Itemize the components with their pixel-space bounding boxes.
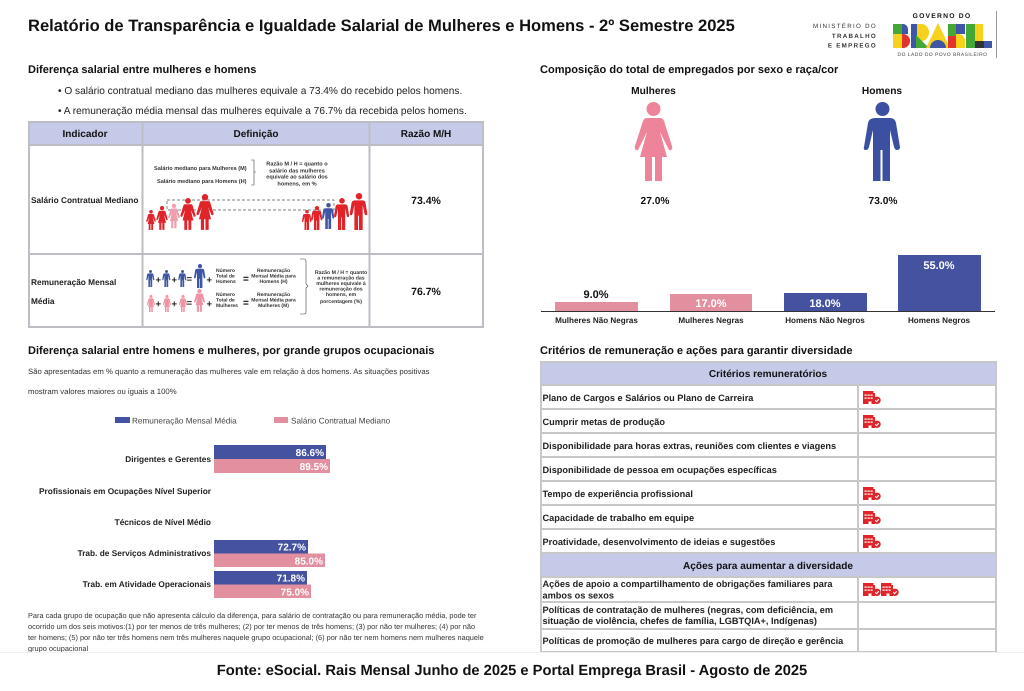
label: homens: Homens [862, 86, 902, 97]
table rows: Ações de apoio a compartilhamento de obrigações familiares para [542, 579, 833, 589]
diagram: salário mediano: Razão M / H = quanto o [266, 160, 328, 168]
table rows: Plano de Cargos e Salários ou Plano de Carreira [542, 393, 754, 403]
heading: critérios: Critérios de remuneração e ações para garantir diversidade [540, 345, 853, 357]
diagram: remuneração média: = [243, 298, 249, 309]
chart: grupos ocupacionais: 86.6% [296, 448, 324, 459]
diagram: salário mediano: Salário mediano para Homens (H) [157, 178, 247, 185]
heading: diferença salarial: Diferença salarial entre mulheres e homens [28, 64, 256, 76]
row: salário contratual mediano: 73.4% [411, 195, 442, 207]
text block: explicação [28, 367, 430, 396]
diagram: remuneração média: + [206, 275, 212, 286]
diagram: remuneração média: Total de [216, 298, 235, 304]
legend: Salário Contratual Mediano [291, 416, 391, 426]
chart: grupos ocupacionais: Trab. de Serviços Administrativos [78, 548, 211, 558]
table rows: Tempo de experiência profissional [542, 489, 693, 499]
row: remuneração mensal média [31, 259, 442, 314]
table: critérios e ações [541, 362, 996, 652]
value: 27,0%: 27.0% [641, 196, 669, 207]
diagram: salário mediano: salário das mulheres [269, 168, 325, 174]
bar: mulheres não negras: 9.0% [583, 289, 609, 301]
chart: grupos ocupacionais [39, 445, 330, 598]
B [893, 24, 902, 34]
bar: mulheres negras [670, 294, 752, 325]
diagram: remuneração média: Número [216, 268, 235, 274]
table rows [542, 393, 844, 646]
R [911, 24, 919, 48]
table section headers [683, 369, 853, 572]
legend: Remuneração Mensal Média [132, 416, 237, 426]
text block: explicação: São apresentadas em % quanto a remuneração das mulheres vale em relação à dos homens. As situações positivas [28, 367, 430, 376]
text block: nota: Para cada grupo de ocupação que não apresenta cálculo da diferença, para salário de contratação ou para remuneração média, pode ter [28, 611, 477, 620]
diagram: remuneração média: Total de [216, 274, 235, 280]
A [926, 23, 950, 48]
text block: nota: ocorrido um dos seis motivos:(1) por ter menos de três mulheres; (2) por ter menos de três homens; (3) por não ter mulheres; (4) por não [28, 622, 475, 631]
table rows: Políticas de promoção de mulheres para cargo de direção e gerência [542, 636, 844, 646]
chart: grupos ocupacionais: 85.0% [295, 556, 323, 568]
text block: bullets: • A remuneração média mensal das mulheres equivale a 76.7% da recebida pelos homens. [58, 106, 467, 117]
diagram: remuneração média: Mensal Média para [251, 274, 296, 280]
text block: bullets [58, 86, 467, 117]
heading: grandes grupos ocupacionais: Diferença salarial entre homens e mulheres, por grande grupos ocupacionais [28, 345, 434, 357]
diagram: remuneração média: + [156, 299, 162, 310]
diagram: remuneração média: + [206, 299, 212, 310]
text block: nota: grupo ocupacional [28, 644, 89, 653]
text block: explicação: mostram valores maiores ou iguais a 100% [28, 387, 177, 396]
row: remuneração mensal média: 76.7% [411, 286, 442, 298]
diagram: remuneração média: Razão M / H = quanto [315, 270, 367, 276]
chart: grupos ocupacionais: Trab. em Atividade Operacionais [83, 579, 211, 589]
logo: Ministério do Trabalho e Emprego [813, 22, 877, 50]
table rows: Capacidade de trabalho em equipe [542, 513, 694, 523]
table rows: ambos os sexos [542, 590, 614, 600]
label: mulheres: Mulheres [631, 86, 676, 97]
heading: composição: Composição do total de empregados por sexo e raça/cor [540, 64, 839, 76]
bar: homens não negros [784, 293, 867, 325]
table rows: Disponibilidade para horas extras, reuniões com clientes e viagens [542, 441, 836, 451]
table header labels [62, 129, 451, 140]
text block: bullets: • O salário contratual mediano das mulheres equivale a 73.4% do recebido pelos homens. [58, 86, 462, 97]
diagram: salário mediano: Salário mediano para Mulheres (M) [154, 165, 247, 172]
legend [115, 416, 391, 426]
diagram: remuneração média: = [243, 274, 249, 285]
diagram: remuneração média: mulheres equivale à [316, 281, 366, 287]
diagram: remuneração média: Mulheres [216, 303, 238, 309]
diagram: remuneração média: Mulheres (M) [258, 303, 289, 309]
row: remuneração mensal média: Remuneração Mensal [31, 277, 116, 287]
logo: Governo do Brasil: GOVERNO DO [913, 13, 971, 20]
diagram: remuneração média: Mensal Média para [251, 298, 296, 304]
icons: empresa com selo [863, 391, 899, 596]
diagram: remuneração média: + [172, 275, 178, 286]
diagram: salário mediano: homens, em % [277, 180, 317, 188]
icon: homem [864, 102, 900, 181]
icon: mulher [635, 102, 672, 181]
bar: homens negros: Homens Negros [908, 316, 971, 325]
logo: Ministério do Trabalho e Emprego: E EMPREGO [828, 42, 877, 50]
diagram: remuneração média: remuneração dos [319, 286, 363, 292]
diagram: salário mediano: equivale ao salário dos [266, 174, 328, 180]
diagram: remuneração média: porcentagem (%) [320, 299, 362, 305]
logo: Ministério do Trabalho e Emprego: TRABALHO [832, 33, 877, 40]
L [975, 24, 983, 41]
bar: mulheres negras: 17.0% [695, 298, 727, 310]
bar: homens negros: 55.0% [923, 260, 955, 272]
diagram: remuneração média: + [172, 299, 178, 310]
diagram: remuneração média: homens, em [326, 292, 357, 298]
bar: mulheres não negras: Mulheres Não Negras [555, 316, 638, 325]
diagram: remuneração média: Homens [216, 279, 236, 285]
table rows: situação de violência, chefes de família, LGBTQIA+, Indígenas) [542, 616, 817, 626]
diagram: remuneração média [146, 259, 367, 314]
bar: homens não negros: Homens Não Negros [785, 316, 865, 325]
I [966, 24, 975, 48]
table rows: Proatividade, desenvolvimento de ideias e sugestões [542, 537, 775, 547]
row: salário contratual mediano: Salário Contratual Mediano [31, 195, 138, 205]
chart: grupos ocupacionais: 89.5% [300, 462, 328, 473]
text block: nota: ter homens; (5) por não ter três homens nem três mulheres naquele grupo ocupacional; (6) por não ter nem homens nem mulheres naquele [28, 633, 484, 642]
diagram: remuneração média: Número [216, 292, 235, 298]
chart: grupos ocupacionais: Profissionais em Ocupações Nível Superior [39, 486, 212, 496]
bar: mulheres não negras [555, 289, 638, 325]
table header labels: Indicador [62, 129, 108, 140]
logo: Governo do Brasil: DO LADO DO POVO BRASILEIRO [898, 52, 987, 58]
title: Relatório de Transparência e Igualdade Salarial de Mulheres e Homens - 2º Semestre 2025 [28, 16, 735, 35]
value: 73,0%: 73.0% [869, 196, 897, 207]
bar: homens negros [898, 255, 981, 325]
table rows: Disponibilidade de pessoa em ocupações específicas [542, 465, 777, 475]
chart: grupos ocupacionais: 72.7% [278, 542, 306, 554]
table section headers: Ações para aumentar a diversidade [683, 561, 853, 572]
logo: Ministério do Trabalho e Emprego: MINISTÉRIO DO [813, 22, 877, 30]
diagram: remuneração média: a remuneração das [317, 276, 365, 282]
row: remuneração mensal média: Média [31, 296, 55, 306]
row: salário contratual mediano [31, 160, 442, 230]
text block: nota [28, 611, 484, 653]
chart: grupos ocupacionais: 75.0% [281, 588, 309, 598]
diagram: remuneração média: Remuneração [257, 292, 290, 298]
diagram: remuneração média: Homens (H) [259, 279, 288, 285]
table rows: Cumprir metas de produção [542, 417, 665, 427]
diagram: remuneração média: + [156, 275, 162, 286]
table rows: Políticas de contratação de mulheres (negras, com deficiência, em [542, 605, 833, 615]
S [948, 24, 956, 36]
table section headers: Critérios remuneratórios [709, 369, 828, 380]
chart: grupos ocupacionais: Técnicos de Nível Médio [115, 517, 211, 527]
bar: homens não negros: 18.0% [809, 298, 841, 310]
diagram: remuneração média: Remuneração [257, 268, 290, 274]
table header labels: Razão M/H [401, 129, 451, 140]
chart: grupos ocupacionais: 71.8% [277, 574, 305, 584]
bar chart: raça/cor [541, 255, 995, 325]
diagram: salário mediano [146, 160, 367, 230]
chart: grupos ocupacionais: Dirigentes e Gerentes [125, 454, 211, 464]
diagram: remuneração média: = [186, 298, 192, 309]
table header labels: Definição [233, 129, 279, 140]
footer source: Fonte: eSocial. Rais Mensal Junho de 2025 e Portal Emprega Brasil - Agosto de 2025 [217, 663, 807, 679]
logo: Governo do Brasil [893, 11, 997, 58]
bar: mulheres negras: Mulheres Negras [678, 316, 744, 325]
diagram: remuneração média: = [186, 274, 192, 285]
